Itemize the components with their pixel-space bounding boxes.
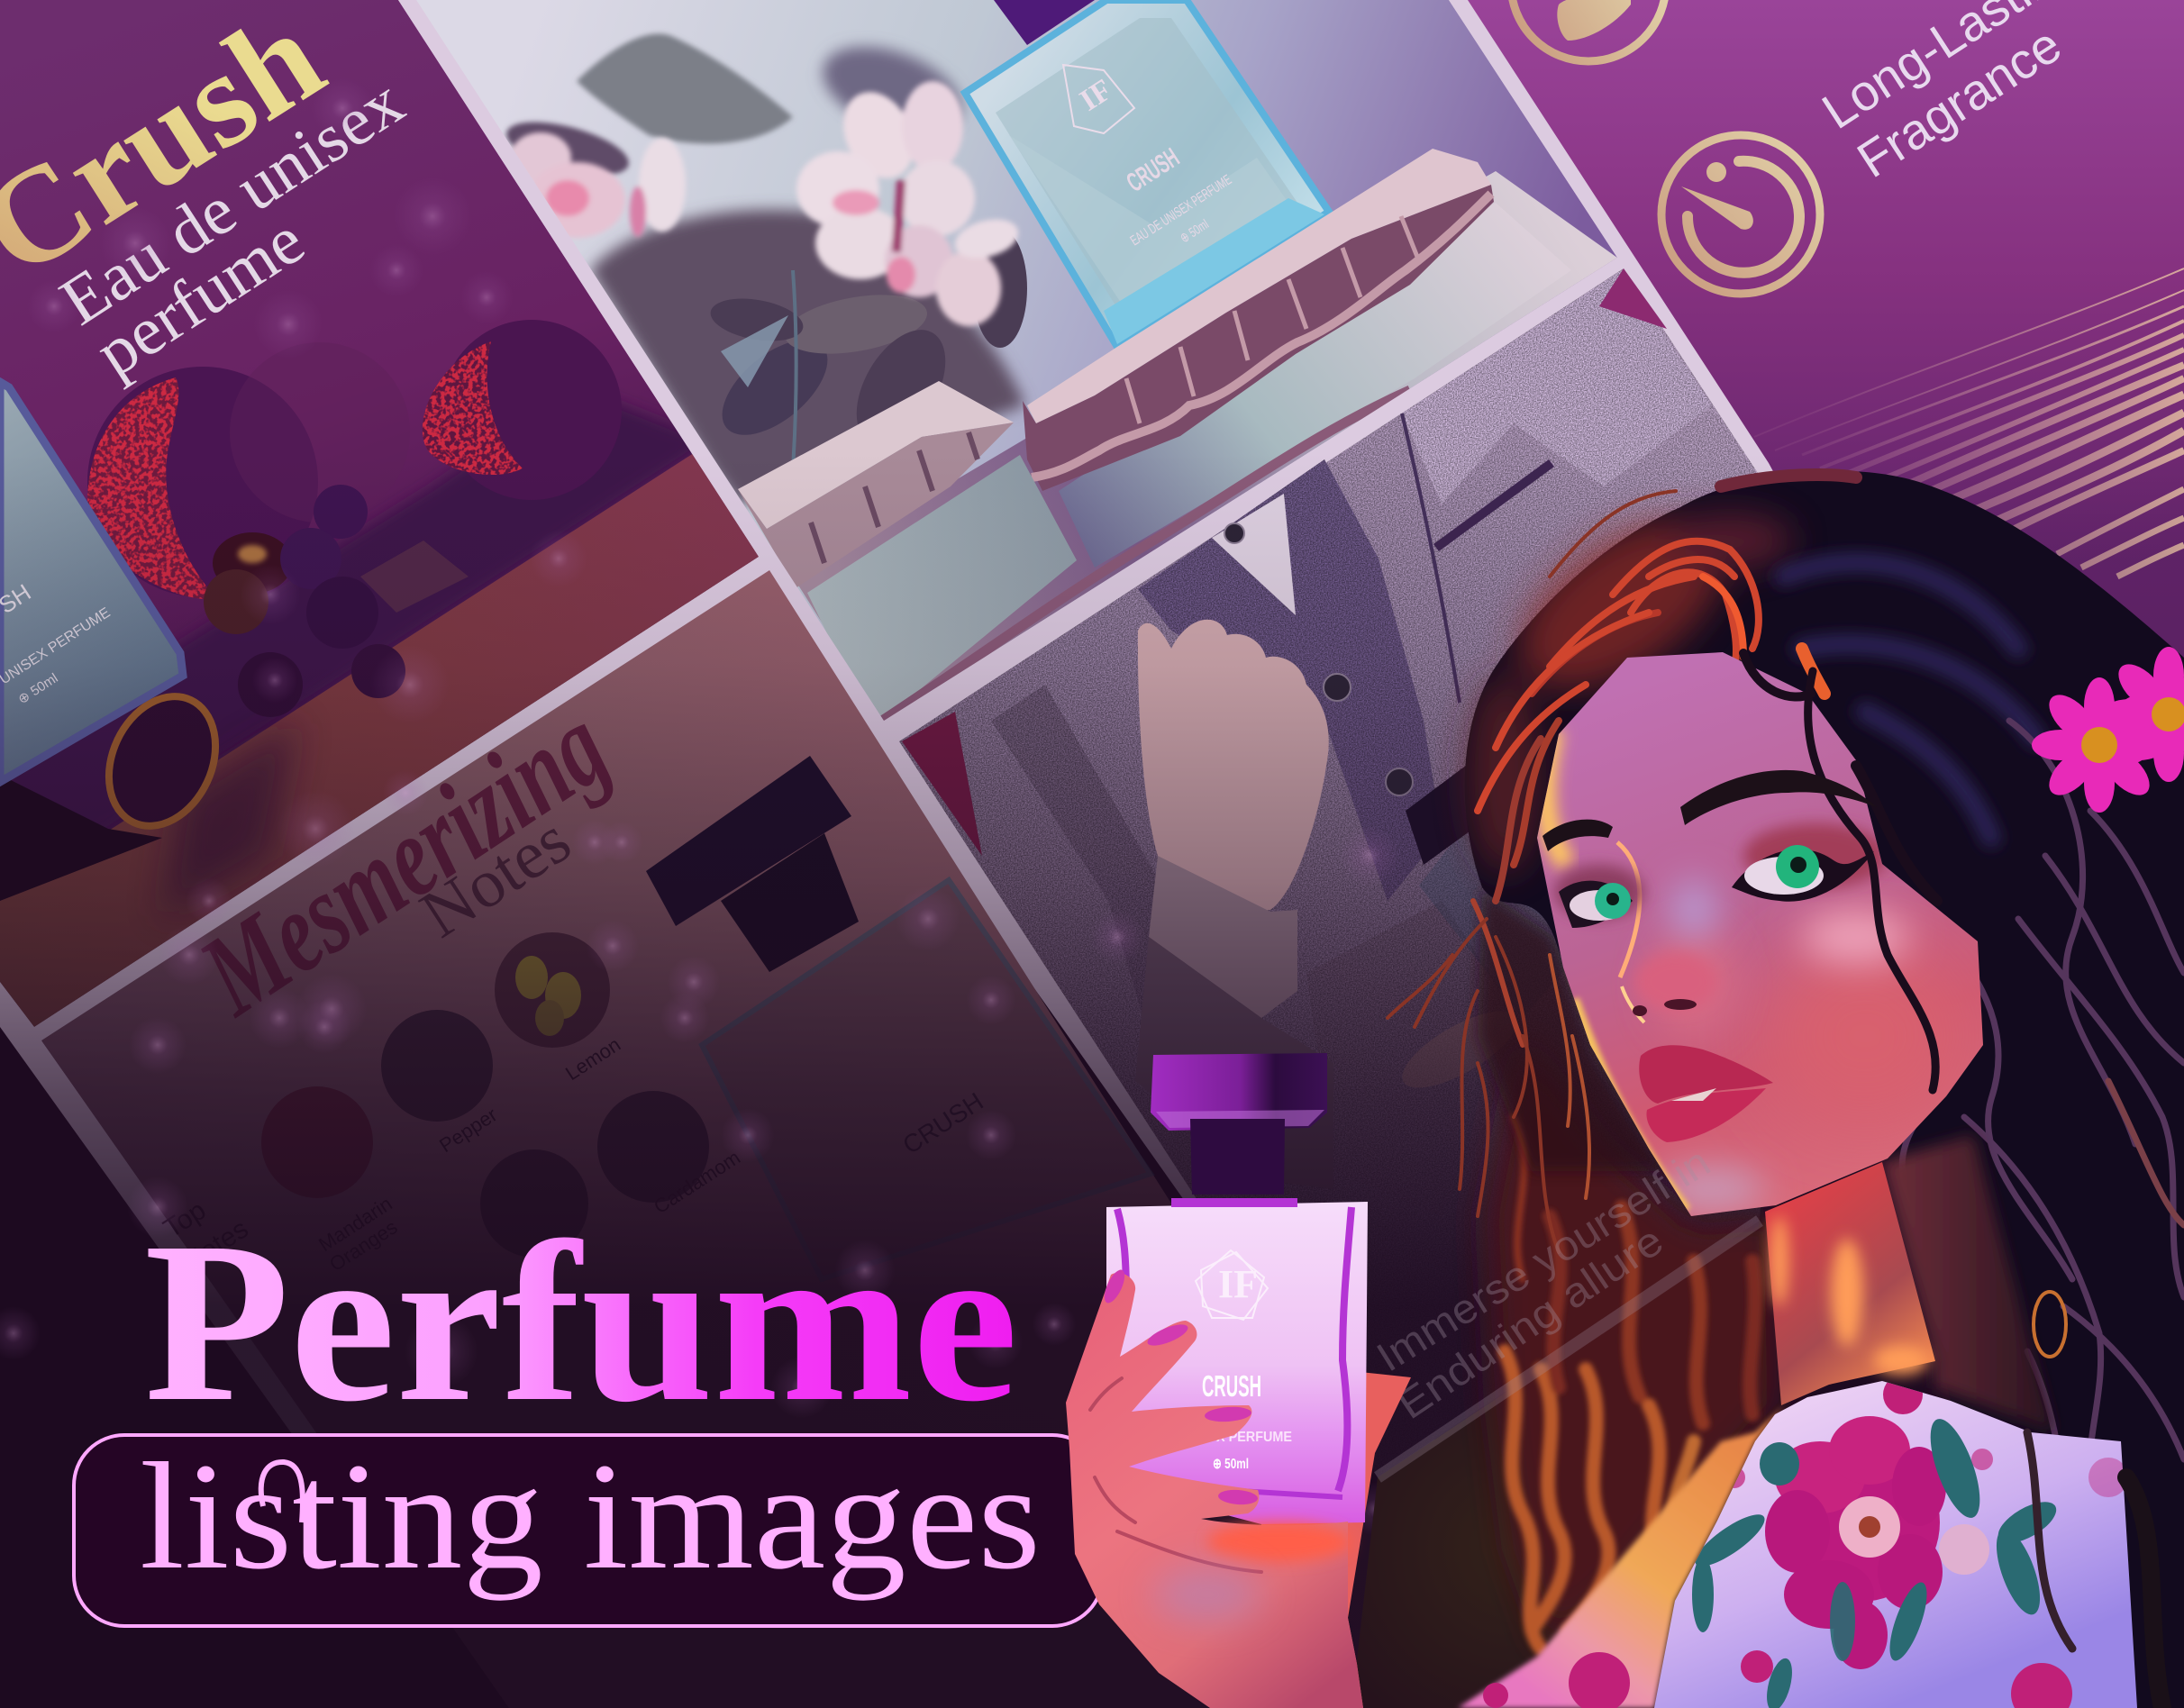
panel: Long-Lasting benefit card bbox=[1468, 0, 2184, 991]
panel: flower and pedestal photo bbox=[416, 0, 1617, 721]
panel: Mesmerizing notes card bbox=[41, 570, 1496, 1708]
hand on waistcoat bbox=[1138, 620, 1329, 911]
labels bbox=[159, 1033, 744, 1277]
heading: Mesmerizing: Mesmerizing bbox=[177, 680, 630, 1040]
background: lower-right dark wedge bbox=[1351, 1221, 1766, 1708]
waistcoat bbox=[1138, 459, 1442, 901]
berries and chestnuts bbox=[204, 485, 469, 717]
hair: left wisps bbox=[1388, 491, 1676, 1252]
eye: left bbox=[1559, 881, 1633, 928]
gold ring bbox=[105, 693, 220, 830]
shirt cuff bbox=[1149, 856, 1297, 1018]
sparkles bbox=[0, 77, 1402, 1536]
hair: red highlights bbox=[1473, 475, 1856, 1045]
pedestal: large drum bbox=[1023, 149, 1571, 568]
bottle labels: CRUSH bbox=[1202, 1369, 1261, 1403]
logo-printed blue bottle: IF bbox=[1074, 73, 1118, 118]
subheading: Eau de unisex perfume: Eau de unisex bbox=[48, 63, 416, 340]
note: pepper bbox=[381, 1010, 493, 1122]
earring bbox=[2034, 1292, 2066, 1357]
note: mandarin bbox=[261, 1086, 373, 1198]
hand creases bbox=[1090, 1378, 1261, 1572]
sleeve bbox=[1135, 937, 1333, 1189]
jacket folds bbox=[1402, 270, 1712, 504]
hair: orange waves behind neck bbox=[1487, 1036, 1779, 1649]
flower: large blossom bbox=[796, 80, 1023, 326]
subtitle badge: listing images: listing images bbox=[140, 1431, 1041, 1601]
rope bbox=[882, 390, 1410, 721]
panel: Crush product card bbox=[0, 0, 759, 1027]
hair: front strands over dress bbox=[2027, 1432, 2162, 1708]
logo-printed blue bottle: CRUSH bbox=[1122, 142, 1185, 198]
perfume bottle, partially cropped: UNISEX PERFUME bbox=[0, 605, 113, 687]
dress bbox=[1654, 1375, 2137, 1708]
bottle labels: ⊕ 50ml bbox=[1213, 1457, 1249, 1472]
title: Perfume: Perfume bbox=[144, 1195, 1018, 1449]
decorative stripes bbox=[1754, 268, 2184, 577]
hair: shade at left of jaw bbox=[1478, 887, 1667, 1171]
black bottle ghost bbox=[1419, 811, 1586, 1018]
divider: strip below caption bbox=[1378, 1221, 1760, 1477]
hand bbox=[1066, 1273, 1363, 1708]
glass edges bbox=[1117, 1203, 1351, 1497]
labels: Cardamom bbox=[650, 1146, 744, 1218]
main bottle held in hand bbox=[1066, 1053, 1411, 1708]
rear bloom bbox=[2101, 647, 2184, 782]
buttons bbox=[1224, 523, 1413, 795]
front bloom bbox=[2032, 677, 2167, 813]
neck highlights bbox=[1770, 1216, 1928, 1375]
fade overlay bbox=[0, 450, 2184, 1708]
neck shadow bbox=[1882, 1135, 2054, 1432]
faint caption over hair: Immerse yourself: Immerse yourself in bbox=[1369, 1138, 1718, 1380]
bottle cap bbox=[1151, 1053, 1327, 1131]
eyebrow: left bbox=[1542, 820, 1613, 851]
bottle labels: X PERFUME bbox=[1216, 1430, 1292, 1445]
nose bbox=[1622, 953, 1717, 1022]
bottle glass bbox=[1106, 1202, 1368, 1524]
labels: Top bbox=[159, 1195, 211, 1244]
note: cardamom bbox=[597, 1091, 709, 1203]
panel: suit photo bbox=[899, 268, 1802, 1477]
hair: dark mass bbox=[1465, 471, 2184, 1708]
fruit: right bbox=[423, 320, 622, 500]
bottle labels bbox=[1202, 1369, 1292, 1472]
dark bottle: CRUSH bbox=[897, 1087, 988, 1159]
nails bbox=[1100, 1267, 1259, 1506]
faint caption over hair: Immerse yourself: Enduring allure bbox=[1389, 1216, 1671, 1428]
icon: partly cropped ring bbox=[1511, 0, 1666, 61]
note: lemon bbox=[495, 932, 610, 1048]
palm glow bbox=[1207, 1522, 1351, 1562]
neck bbox=[1765, 1162, 1935, 1405]
labels: Lemon bbox=[561, 1033, 624, 1085]
face bbox=[1537, 652, 1983, 1216]
dark sill bbox=[0, 775, 162, 901]
hair: wavy purple strands bbox=[1901, 721, 2184, 1622]
small blooms bbox=[1724, 1375, 2128, 1708]
labels: Pepper bbox=[435, 1104, 501, 1157]
peony bbox=[1765, 1416, 1946, 1669]
bottle logo: IF bbox=[1218, 1262, 1258, 1306]
labels: Notes bbox=[178, 1214, 254, 1277]
leaves bbox=[501, 30, 1027, 504]
logo-printed blue bottle: EAU DE UNISEX PERFUME bbox=[1128, 172, 1234, 249]
shirt bbox=[1212, 494, 1296, 615]
woman bbox=[1388, 471, 2184, 1708]
dark area behind table bbox=[11, 400, 696, 815]
perfume bottle, partially cropped: ⊕ 50ml bbox=[15, 670, 60, 707]
hair: purple-navy sheen bbox=[1784, 562, 2036, 838]
divider: left edge of notes card bbox=[0, 989, 324, 1441]
subheading: Notes: Notes bbox=[408, 802, 584, 952]
hair: curl across temple bbox=[1743, 653, 1937, 1090]
bottle collar bbox=[1190, 1119, 1285, 1195]
dark bottle bbox=[646, 756, 1151, 1279]
note: spice bbox=[480, 1149, 588, 1258]
subheading: Eau de unisex perfume: perfume bbox=[83, 202, 317, 391]
pedestal: small drum bbox=[738, 381, 1077, 721]
fruit: left bbox=[87, 367, 318, 599]
logo-printed blue bottle: ⊕ 50ml bbox=[1178, 217, 1212, 246]
labels: Mandarin bbox=[314, 1192, 396, 1256]
ghost hand bbox=[1392, 996, 1527, 1103]
flower: small blossoms bbox=[510, 132, 686, 238]
eyebrow: right bbox=[1680, 770, 1877, 825]
arm and shoulder skin bbox=[1458, 1405, 1784, 1708]
sleeve print bbox=[1483, 1652, 1630, 1708]
labels: Oranges bbox=[325, 1215, 401, 1276]
hair: red tinted crown bbox=[1469, 485, 1793, 874]
thumb behind bottle bbox=[1261, 1371, 1411, 1708]
logo-printed blue bottle bbox=[965, 0, 1329, 347]
text: Long-Lasting Fragrance: Fragrance bbox=[1847, 15, 2070, 188]
table surface bbox=[0, 441, 759, 1027]
panel: light collage dividers bbox=[0, 0, 1802, 1513]
lips bbox=[1639, 1045, 1773, 1142]
leaves bbox=[1688, 1413, 2062, 1708]
flower hair accessory bbox=[2032, 647, 2184, 813]
bottle logo bbox=[1196, 1250, 1268, 1320]
perfume bottle, partially cropped bbox=[0, 382, 183, 782]
icon: timer bbox=[1661, 135, 1820, 294]
eye: right bbox=[1732, 845, 1874, 902]
floor band behind the pedestals bbox=[793, 171, 1617, 721]
